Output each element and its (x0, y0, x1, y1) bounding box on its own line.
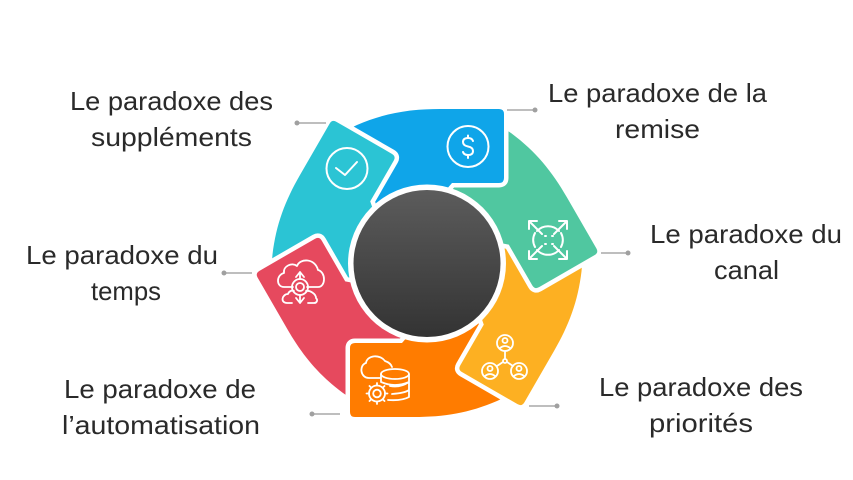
label: supplements (70, 86, 273, 152)
connector: automatisation (310, 412, 340, 416)
segment: blue head over green tail (415, 109, 508, 189)
segment: teal (250, 119, 454, 332)
label: temps: Le paradoxe du (26, 240, 218, 270)
label: temps (26, 240, 218, 306)
icon: people network (482, 335, 527, 379)
label: automatisation: l’automatisation (62, 410, 260, 440)
connector: priorites (529, 404, 560, 408)
label: temps: temps (91, 276, 161, 306)
label: remise: remise (615, 114, 700, 144)
icon: check (326, 148, 368, 189)
segment: orange (350, 276, 514, 417)
label: remise (548, 78, 768, 144)
label: canal (650, 219, 842, 285)
label: priorites (599, 372, 803, 438)
icon: expand (529, 221, 567, 259)
center circle (348, 184, 506, 342)
label: priorites: priorités (649, 408, 753, 438)
label: supplements: suppléments (91, 122, 252, 152)
label: canal: Le paradoxe du (650, 219, 842, 249)
icon: cloud arrows (278, 260, 324, 303)
label: canal: canal (714, 255, 779, 285)
label: automatisation: Le paradoxe de (64, 374, 256, 404)
connector: supplements (294, 120, 326, 126)
segment: yellow (400, 194, 604, 407)
label: automatisation (62, 374, 260, 440)
infographic: cycle of six paradoxes (28, 83, 840, 438)
icon: cloud database (361, 356, 409, 404)
connector: temps (222, 270, 252, 276)
icon: dollar (448, 126, 488, 167)
segment: blue (340, 109, 504, 250)
label: supplements: Le paradoxe des (70, 86, 273, 116)
connector: remise (507, 108, 538, 112)
segment: red (255, 203, 459, 415)
segment: green (395, 111, 599, 323)
label: remise: Le paradoxe de la (548, 78, 768, 108)
connector: canal (601, 250, 630, 256)
label: priorites: Le paradoxe des (599, 372, 803, 402)
